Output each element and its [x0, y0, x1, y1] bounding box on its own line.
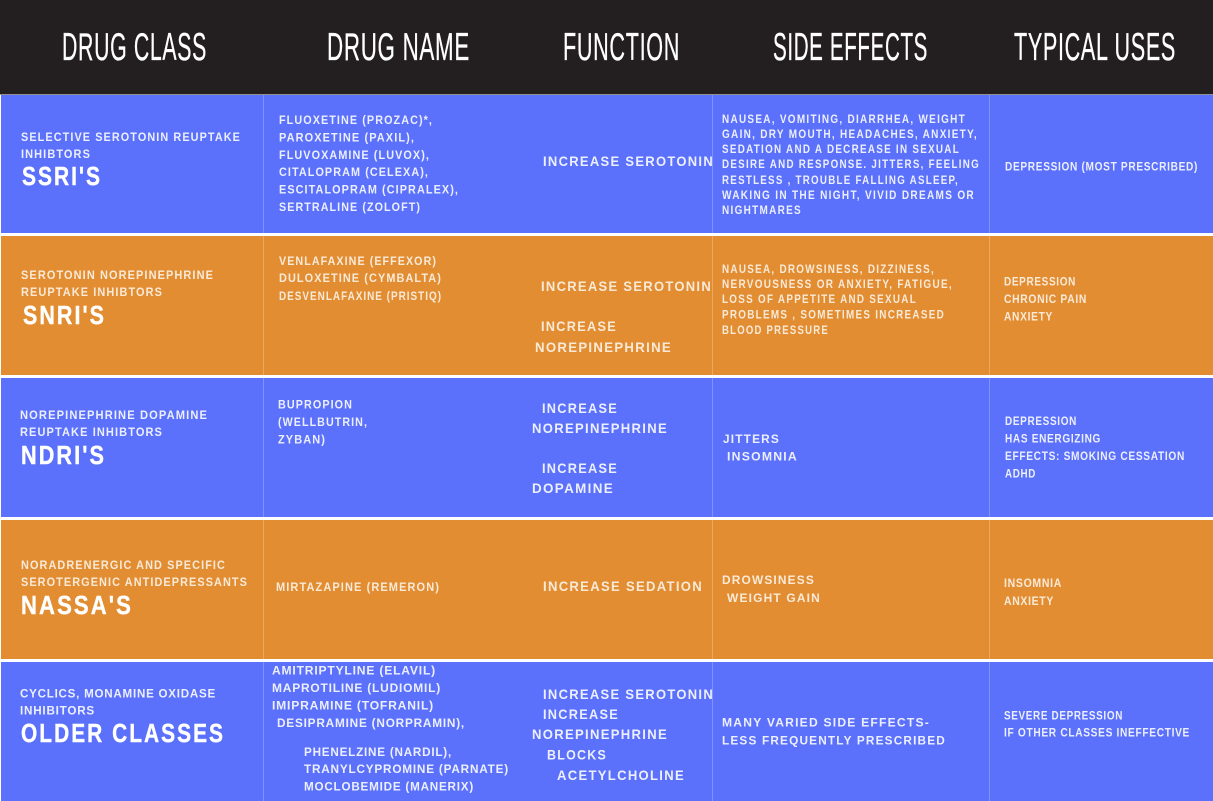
- typical uses: NASSA: [1004, 576, 1062, 608]
- side effects: NDRI: JITTERS: [723, 432, 780, 446]
- drug class: NASSA: [21, 558, 248, 620]
- heading: function: FUNCTION: [563, 26, 680, 69]
- drug class: SNRI: REUPTAKE INHIBTORS: [21, 285, 163, 299]
- drug class: SSRI: [21, 130, 241, 191]
- row: SNRI: [1, 236, 1213, 375]
- drug names: older classes: TRANYLCYPROMINE (PARNATE): [304, 762, 509, 776]
- drug names: SNRI: DESVENLAFAXINE (PRISTIQ): [279, 289, 442, 303]
- drug names: SSRI: CITALOPRAM (CELEXA),: [279, 165, 429, 179]
- side effects: SSRI: GAIN, DRY MOUTH, HEADACHES, ANXIETY,: [722, 129, 978, 141]
- drug names: older classes: [272, 664, 509, 794]
- side effects: NASSA: [722, 573, 821, 605]
- function: NDRI: INCREASE: [542, 400, 618, 416]
- drug names: SSRI: ESCITALOPRAM (CIPRALEX),: [279, 182, 459, 196]
- function: NASSA: INCREASE SEDATION: [543, 578, 703, 594]
- side effects: SNRI: PROBLEMS , SOMETIMES INCREASED: [722, 310, 945, 322]
- drug names: older classes: MAPROTILINE (LUDIOMIL): [272, 681, 441, 695]
- typical uses: NDRI: [1005, 414, 1185, 480]
- function: SNRI: [535, 278, 712, 355]
- drug names: SNRI: [279, 254, 442, 303]
- drug class: SSRI: SSRI'S: [22, 161, 102, 191]
- drug class: older classes: OLDER CLASSES: [21, 718, 225, 748]
- side effects: SNRI: BLOOD PRESSURE: [722, 325, 829, 337]
- drug class: NASSA: NORADRENERGIC AND SPECIFIC: [21, 558, 226, 572]
- drug names: NDRI: BUPROPION: [278, 398, 353, 412]
- drug names: SSRI: SERTRALINE (ZOLOFT): [279, 200, 421, 214]
- drug class: SSRI: INHIBTORS: [21, 147, 91, 161]
- typical uses: older classes: SEVERE DEPRESSION: [1004, 708, 1123, 722]
- function: older classes: BLOCKS: [547, 746, 607, 762]
- heading: drug class: DRUG CLASS: [62, 26, 207, 69]
- row: NASSA: [1, 520, 1213, 659]
- drug class: NDRI: NOREPINEPHRINE DOPAMINE: [20, 408, 208, 422]
- heading: side effects: SIDE EFFECTS: [773, 26, 928, 69]
- typical uses: NDRI: HAS ENERGIZING: [1005, 432, 1101, 446]
- drug names: older classes: PHENELZINE (NARDIL),: [304, 745, 452, 759]
- side effects: NDRI: [723, 432, 798, 464]
- function: older classes: INCREASE SEROTONIN: [543, 686, 714, 702]
- drug class: NDRI: REUPTAKE INHIBTORS: [20, 425, 163, 439]
- function: older classes: NOREPINEPHRINE: [532, 726, 668, 742]
- typical uses: NDRI: EFFECTS: SMOKING CESSATION: [1005, 449, 1185, 463]
- row: older classes: [1, 662, 1213, 801]
- typical uses: SNRI: [1004, 274, 1087, 324]
- header bar: [0, 0, 1213, 94]
- drug class: NDRI: [20, 408, 208, 470]
- side effects: SSRI: WAKING IN THE NIGHT, VIVID DREAMS OR: [722, 190, 975, 202]
- drug class: NDRI: NDRI'S: [21, 440, 106, 470]
- typical uses: SNRI: ANXIETY: [1004, 310, 1053, 324]
- drug class: older classes: CYCLICS, MONAMINE OXIDASE: [20, 686, 216, 700]
- side effects: SNRI: LOSS OF APPETITE AND SEXUAL: [722, 294, 917, 306]
- side effects: NASSA: DROWSINESS: [722, 573, 815, 587]
- side effects: older classes: LESS FREQUENTLY PRESCRIBED: [722, 734, 946, 748]
- drug names: older classes: DESIPRAMINE (NORPRAMIN),: [277, 716, 465, 730]
- typical uses: SNRI: CHRONIC PAIN: [1004, 292, 1087, 306]
- typical uses: older classes: [1004, 708, 1190, 740]
- drug class: older classes: INHIBITORS: [20, 704, 95, 718]
- drug names: SSRI: [279, 113, 459, 214]
- drug names: SSRI: PAROXETINE (PAXIL),: [279, 130, 415, 144]
- drug names: NDRI: (WELLBUTRIN,: [278, 415, 368, 429]
- side effects: SNRI: NAUSEA, DROWSINESS, DIZZINESS,: [722, 264, 935, 276]
- side effects: NASSA: WEIGHT GAIN: [727, 591, 821, 605]
- function: SNRI: INCREASE: [541, 318, 617, 334]
- side effects: NDRI: INSOMNIA: [727, 450, 798, 464]
- drug class: SSRI: SELECTIVE SEROTONIN REUPTAKE: [21, 130, 241, 144]
- side effects: SSRI: SEDATION AND A DECREASE IN SEXUAL: [722, 144, 960, 156]
- typical uses: NASSA: ANXIETY: [1004, 594, 1054, 608]
- function: older classes: [532, 686, 714, 783]
- typical uses: NASSA: INSOMNIA: [1004, 576, 1062, 590]
- drug names: NDRI: [278, 398, 368, 446]
- row: NDRI: [1, 378, 1213, 517]
- drug names: SNRI: VENLAFAXINE (EFFEXOR): [279, 254, 437, 268]
- side effects: older classes: MANY VARIED SIDE EFFECTS-: [722, 716, 930, 730]
- drug class: SNRI: [21, 268, 214, 330]
- side effects: SSRI: RESTLESS , TROUBLE FALLING ASLEEP,: [722, 175, 959, 187]
- heading: drug name: DRUG NAME: [327, 26, 470, 69]
- function: SNRI: NOREPINEPHRINE: [535, 339, 672, 355]
- row: SSRI: [1, 95, 1213, 233]
- function: NDRI: [532, 400, 668, 496]
- drug class: SNRI: SEROTONIN NOREPINEPHRINE: [21, 268, 214, 282]
- function: NDRI: INCREASE: [542, 460, 618, 476]
- side effects: older classes: [722, 716, 946, 748]
- drug names: older classes: AMITRIPTYLINE (ELAVIL): [272, 664, 436, 678]
- drug names: NASSA: MIRTAZAPINE (REMERON): [276, 580, 440, 594]
- function: NDRI: DOPAMINE: [532, 480, 614, 496]
- drug names: NDRI: ZYBAN): [278, 432, 326, 446]
- drug names: SSRI: FLUOXETINE (PROZAC)*,: [279, 113, 433, 127]
- side effects: SNRI: NERVOUSNESS OR ANXIETY, FATIGUE,: [722, 279, 953, 291]
- side effects: SSRI: NAUSEA, VOMITING, DIARRHEA, WEIGHT: [722, 114, 966, 126]
- function: older classes: ACETYLCHOLINE: [557, 767, 685, 783]
- function: older classes: INCREASE: [543, 706, 619, 722]
- function: SSRI: INCREASE SEROTONIN: [543, 153, 714, 169]
- function: SNRI: INCREASE SEROTONIN: [541, 278, 712, 294]
- drug class: older classes: [20, 686, 225, 748]
- typical uses: SNRI: DEPRESSION: [1004, 274, 1076, 288]
- side effects: SSRI: DESIRE AND RESPONSE. JITTERS, FEELING: [722, 159, 980, 171]
- typical uses: NDRI: DEPRESSION: [1005, 414, 1077, 428]
- drug names: older classes: IMIPRAMINE (TOFRANIL): [272, 698, 434, 712]
- drug class: SNRI: SNRI'S: [23, 300, 106, 330]
- typical uses: NDRI: ADHD: [1005, 466, 1036, 480]
- drug names: older classes: MOCLOBEMIDE (MANERIX): [304, 780, 474, 794]
- side effects: SSRI: [722, 114, 980, 217]
- side effects: SNRI: [722, 264, 953, 337]
- drug names: SNRI: DULOXETINE (CYMBALTA): [279, 271, 442, 285]
- drug class: NASSA: SEROTERGENIC ANTIDEPRESSANTS: [21, 575, 248, 589]
- function: NDRI: NOREPINEPHRINE: [532, 420, 668, 436]
- drug names: SSRI: FLUVOXAMINE (LUVOX),: [279, 148, 430, 162]
- side effects: SSRI: NIGHTMARES: [722, 205, 802, 217]
- drug class: NASSA: NASSA'S: [21, 590, 133, 620]
